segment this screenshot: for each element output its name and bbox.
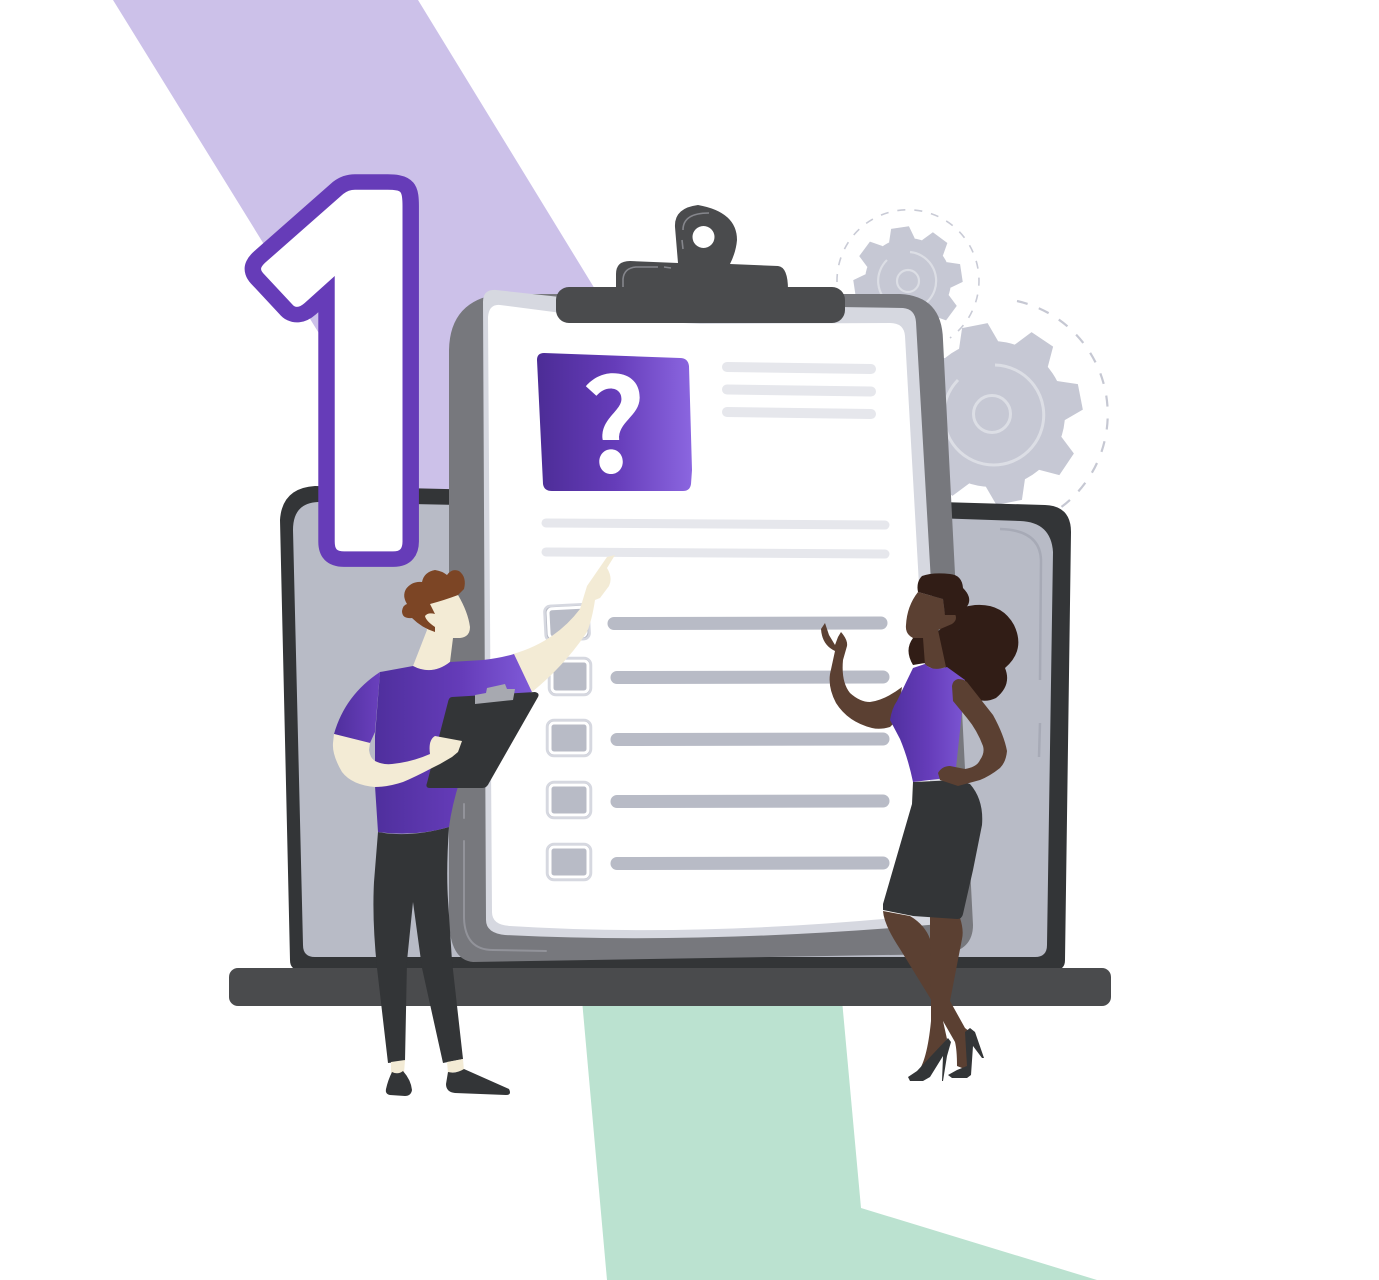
woman hair bun (908, 605, 1018, 701)
laptop body (280, 486, 1071, 970)
man figure (333, 555, 615, 1096)
paper edge (483, 290, 950, 938)
clipboard board (449, 294, 973, 962)
man right shoe (446, 1069, 510, 1095)
woman raised arm (821, 623, 902, 729)
checklist box inner margins (548, 607, 588, 877)
woman top (890, 664, 965, 782)
big numeral 1: 1 (209, 152, 508, 618)
man shirt (375, 654, 532, 834)
clipboard board highlights (464, 804, 546, 951)
man ankles (391, 1059, 464, 1073)
woman skirt (883, 780, 982, 919)
woman left-side leg (917, 916, 963, 1073)
dashed orbit: small gear (837, 210, 979, 338)
icon: large gear (906, 322, 1084, 506)
man neck and face (413, 595, 470, 670)
header text lines (727, 367, 871, 414)
paper sheet (488, 305, 937, 930)
man left shoe (386, 1071, 412, 1096)
man held clip (475, 684, 515, 704)
clipboard clip (556, 205, 845, 323)
man sleeve (334, 672, 380, 743)
dashed orbit: large gear (1017, 301, 1108, 508)
laptop screen highlights (1000, 529, 1041, 757)
woman face and neck (906, 592, 956, 670)
woman back shoe (948, 1028, 984, 1078)
laptop base (229, 968, 1111, 1006)
lilac background band (113, 0, 620, 510)
woman figure (821, 573, 1018, 1081)
man right arm (513, 555, 615, 692)
body text lines (546, 523, 885, 554)
checklist boxes (544, 604, 591, 880)
woman hip arm (938, 679, 1007, 786)
woman front shoe (908, 1038, 951, 1081)
laptop screen (293, 502, 1053, 957)
icon: small gear (853, 226, 963, 324)
man hair (402, 570, 465, 632)
green background band (582, 1000, 1097, 1280)
checklist bars (614, 623, 883, 864)
question mark: ? (580, 324, 646, 509)
question icon tile (537, 353, 692, 491)
woman top hair (918, 573, 969, 615)
woman right-side leg (883, 911, 970, 1070)
man left arm (333, 734, 462, 787)
man trousers (373, 827, 463, 1063)
man held clipboard (426, 692, 539, 788)
